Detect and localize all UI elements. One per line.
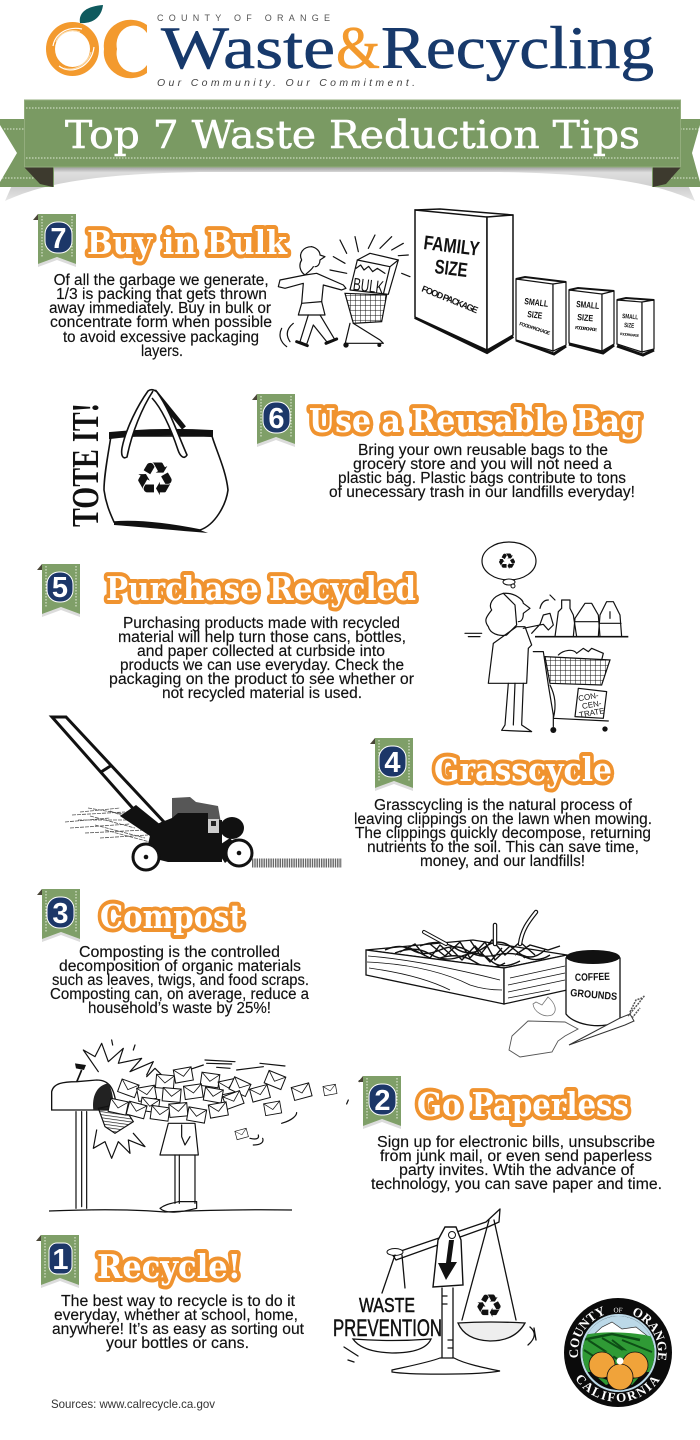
figure: woman and cart <box>465 593 628 733</box>
line: ground <box>49 1210 292 1212</box>
text: tip 5 body: material will help turn those cans, bottles, <box>118 629 406 646</box>
badge: number 3: 3 <box>52 898 69 930</box>
box: small size 2: SIZE <box>577 312 594 323</box>
text: concentrate box label: CON- <box>578 691 600 703</box>
text: tip 5 body: packaging on the product to see whether or <box>109 671 414 688</box>
text: tip 7 body: layers. <box>141 343 183 360</box>
illustration: lawn mower <box>52 717 342 870</box>
text: tip 4 body: money, and our landfills! <box>420 853 585 870</box>
text: bulk: BULK <box>352 274 385 298</box>
text: seal of: OF <box>614 1308 622 1312</box>
box: small size 2 <box>569 288 614 353</box>
text: seal orange: ORANGE <box>633 1308 667 1360</box>
badge: number 7: 7 <box>50 223 67 255</box>
text: concentrate box label: TRATE <box>578 706 605 720</box>
illustration: waste prevention scale <box>333 1209 536 1374</box>
text: tip 2 body: party invites. Wtih the advance of <box>399 1162 635 1179</box>
badge: number 6 <box>252 394 295 447</box>
icon: orange letter O <box>50 26 94 72</box>
badge: number 1: 1 <box>52 1244 69 1276</box>
box: small size 1: SMALL <box>524 296 549 309</box>
heading: grasscycle: Grasscycle <box>434 750 612 789</box>
heading: recycle: Recycle! <box>97 1247 241 1286</box>
text: tip 7 body: 1/3 is packing that gets thrown <box>56 286 267 303</box>
can: coffee grounds: COFFEE <box>575 971 610 984</box>
box: small size 3: FOOD PACKAGE <box>620 332 640 338</box>
text: concentrate box label: CEN- <box>581 699 602 711</box>
panel: tip 3 compost <box>37 889 645 1057</box>
badge: number 4: 4 <box>384 747 401 779</box>
text: county of orange: COUNTY OF ORANGE <box>157 13 330 23</box>
wordmark: waste and recycling: Recycling <box>381 15 654 81</box>
panel: tip 1 recycle <box>36 1208 672 1407</box>
illustration: tote bag <box>65 390 228 533</box>
can: coffee grounds <box>566 950 620 1026</box>
seal: county of orange <box>564 1298 672 1407</box>
illustration: shopper with bulk box <box>278 235 410 348</box>
text: tip 7 body: away immediately. Buy in bulk or <box>49 300 271 317</box>
text: tip 6 body: grocery store and you will not need a <box>353 456 612 473</box>
icon: recycling symbol: ♻ <box>475 1287 503 1325</box>
text: tip 3 body: such as leaves, twigs, and food scraps. <box>52 972 309 989</box>
text: tip 4 body: The clippings quickly decompose, returning <box>355 825 651 842</box>
heading: compost: Compost <box>100 897 244 936</box>
box: family size: SIZE <box>433 256 469 282</box>
icon: thought bubble with recycling symbol <box>482 542 536 588</box>
text: tip 5 body: products we can use everyday. Check the <box>120 657 404 674</box>
badge: number 1 <box>36 1235 79 1288</box>
heading: go paperless: Go Paperless <box>417 1085 629 1124</box>
icon: thought bubble with recycling symbol: ♻ <box>497 550 517 575</box>
heading: title: Top 7 Waste Reduction Tips <box>65 113 640 157</box>
box: family size: FOOD PACKAGE <box>420 284 480 315</box>
box: small size 2: SMALL <box>576 299 600 311</box>
box: family size <box>415 209 513 352</box>
wordmark: waste and recycling: & <box>336 15 380 81</box>
badge: number 2 <box>358 1076 401 1129</box>
box: small size 3: SIZE <box>624 322 635 330</box>
text: tip 5 body <box>109 615 414 702</box>
text: tote it: TOTE IT! <box>65 403 107 527</box>
text: tip 6 body <box>329 442 635 501</box>
text: tip 5 body: Purchasing products made with recycled <box>123 615 400 632</box>
text: concentrate box label <box>576 690 605 720</box>
panel: tip 6 reusable bag <box>65 390 641 533</box>
text: tip 2 body <box>371 1134 662 1193</box>
text: tip 4 body: Grasscycling is the natural process of <box>374 797 633 814</box>
text: tip 1 body <box>52 1293 305 1352</box>
box: small size 1 <box>516 277 566 354</box>
box: small size 3: SMALL <box>622 313 638 321</box>
wordmark: waste and recycling: Waste <box>161 15 335 81</box>
text: tip 6 body: Bring your own reusable bags to the <box>358 442 608 459</box>
wordmark: waste and recycling <box>161 15 654 81</box>
text: tip 3 body: decomposition of organic materials <box>59 958 301 975</box>
badge: number 3 <box>37 889 80 942</box>
logo: OC Waste and Recycling <box>50 5 654 89</box>
box: family size: FAMILY <box>422 232 481 261</box>
text: tip 4 body: nutrients to the soil. This can save time, <box>367 839 639 856</box>
illustration: woman thinking at shelf with cart <box>465 542 628 733</box>
box: small size 3 <box>617 298 654 355</box>
banner: top 7 waste reduction tips <box>0 100 700 201</box>
text: tip 1 body: The best way to recycle is to do it <box>61 1293 296 1310</box>
heading: buy in bulk: Buy in Bulk <box>87 223 288 262</box>
text: tip 6 body: of unecessary trash in our landfills everyday! <box>329 484 635 501</box>
box: small size 1: SIZE <box>527 309 543 321</box>
text: tip 1 body: your bottles or cans. <box>106 1335 249 1352</box>
text: tip 4 body <box>354 797 652 870</box>
badge: number 7 <box>33 214 76 267</box>
panel: tip 7 buy in bulk <box>33 209 654 360</box>
badge: number 5: 5 <box>52 572 68 604</box>
text: tip 7 body: concentrate form when possible <box>50 314 272 331</box>
text: tip 6 body: plastic bag. Plastic bags contribute to tons <box>338 470 626 487</box>
box: small size 2: FOOD PACKAGE <box>575 325 597 332</box>
text: waste: WASTE <box>359 1295 415 1317</box>
text: tip 3 body: Composting can, on average, reduce a <box>50 986 309 1003</box>
text: tip 7 body: to avoid excessive packaging <box>63 329 259 346</box>
text: tip 5 body: and paper collected at curbside into <box>137 643 385 660</box>
text: tip 5 body: not recycled material is used. <box>162 685 362 702</box>
text: tip 3 body <box>50 944 309 1017</box>
text: tip 7 body <box>49 272 272 360</box>
icon: orange leaf <box>80 5 103 23</box>
text: seal county: COUNTY <box>569 1306 604 1358</box>
panel: tip 5 purchase recycled <box>37 542 628 733</box>
illustration: family and small size boxes <box>415 209 654 355</box>
icon: orange letter C <box>104 20 147 78</box>
panel: tip 4 grasscycle <box>52 717 652 870</box>
text: seal california: CALIFORNIA <box>576 1375 660 1402</box>
text: tip 3 body: household’s waste by 25%! <box>88 1000 271 1017</box>
illustration: compost bin with coffee can, bread, carrot <box>366 912 645 1057</box>
badge: number 4 <box>370 738 413 791</box>
text: tagline: Our Community. Our Commitment. <box>157 77 415 89</box>
text: tip 3 body: Composting is the controlled <box>79 944 280 961</box>
text: tip 1 body: everyday, whether at school, home, <box>54 1307 298 1324</box>
badge: number 5 <box>37 564 80 617</box>
text: tip 2 body: Sign up for electronic bills, unsubscribe <box>377 1134 655 1151</box>
text: tip 4 body: leaving clippings on the lawn when mowing. <box>354 811 652 828</box>
text: tip 2 body: technology, you can save paper and time. <box>371 1176 662 1193</box>
panel: tip 2 go paperless <box>49 1040 662 1212</box>
badge: number 2: 2 <box>374 1085 391 1117</box>
box: small size 1: FOOD PACKAGE <box>518 321 551 337</box>
heading: use a reusable bag: Use a Reusable Bag <box>309 401 641 440</box>
text: tip 1 body: anywhere! It’s as easy as sorting out <box>52 1321 305 1338</box>
heading: purchase recycled: Purchase Recycled <box>106 569 416 608</box>
can: coffee grounds: GROUNDS <box>570 987 618 1003</box>
badge: number 6: 6 <box>268 403 285 435</box>
text: sources: Sources: www.calrecycle.ca.gov <box>51 1397 215 1411</box>
text: tip 2 body: from junk mail, or even send paperless <box>380 1148 652 1165</box>
illustration: overflowing mailbox <box>52 1040 359 1212</box>
text: prevention: PREVENTION <box>333 1315 442 1342</box>
text: tip 7 body: Of all the garbage we generate, <box>54 272 269 289</box>
icon: recycling symbol: ♻ <box>134 452 176 506</box>
